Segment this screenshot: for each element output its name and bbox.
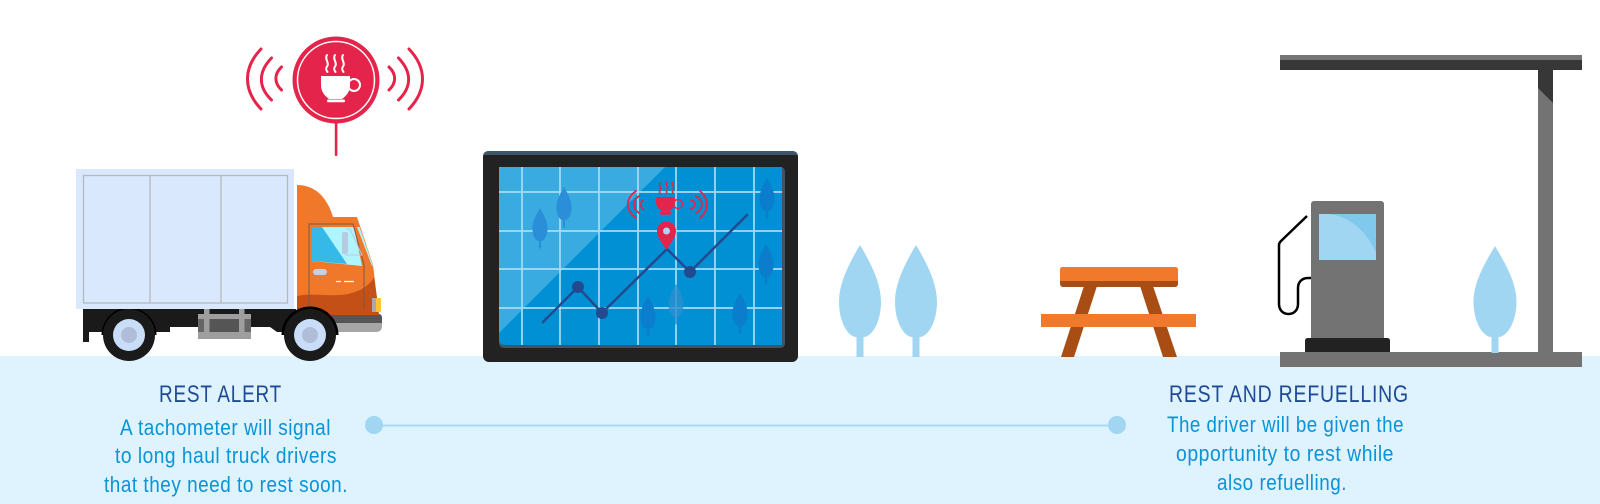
beacon disc bbox=[292, 36, 380, 124]
screen edge bbox=[499, 167, 785, 348]
description: rest alert bbox=[104, 415, 348, 497]
screen highlight bbox=[499, 167, 665, 333]
fuel tank bbox=[198, 309, 251, 339]
bench bbox=[1041, 314, 1196, 327]
side mirror bbox=[342, 229, 362, 255]
station canopy bbox=[1280, 55, 1582, 70]
door outline bbox=[309, 224, 364, 312]
fuel hose bbox=[1279, 216, 1312, 314]
rear wheel bbox=[103, 309, 155, 361]
headlight bbox=[372, 298, 381, 312]
text block: rest alert bbox=[104, 381, 348, 497]
timeline connector bbox=[365, 416, 1126, 434]
route line bbox=[543, 215, 747, 322]
alert beacon with coffee cup bbox=[248, 36, 422, 156]
description: rest alert: that they need to rest soon. bbox=[104, 472, 348, 497]
tree bbox=[1474, 246, 1516, 353]
icon: small coffee cup with signal bbox=[628, 182, 707, 218]
table legs bbox=[1061, 286, 1177, 357]
picnic table bbox=[1041, 267, 1196, 357]
station post bbox=[1538, 70, 1553, 355]
windshield bbox=[357, 227, 373, 266]
screen map bbox=[499, 167, 782, 345]
tablet navigation map bbox=[483, 151, 798, 362]
pump display bbox=[1319, 214, 1376, 260]
truck cargo box bbox=[76, 169, 294, 309]
signal waves left bbox=[248, 49, 282, 109]
fuel station bbox=[1279, 55, 1582, 367]
tree bbox=[895, 245, 937, 357]
text block: rest and refuelling bbox=[1167, 381, 1409, 495]
door handle bbox=[313, 269, 327, 275]
description: rest and refuelling: also refuelling. bbox=[1217, 470, 1347, 495]
truck cab bbox=[297, 185, 381, 315]
description: rest and refuelling: opportunity to rest while bbox=[1176, 441, 1394, 466]
truck bumper bbox=[330, 314, 382, 332]
station forecourt bbox=[1280, 352, 1582, 367]
map pin bbox=[657, 222, 676, 250]
beacon stem bbox=[335, 120, 337, 156]
description: rest alert: to long haul truck drivers bbox=[115, 443, 337, 468]
tree bbox=[839, 245, 881, 357]
front wheel bbox=[282, 306, 338, 361]
description: rest and refuelling: The driver will be given the bbox=[1167, 412, 1404, 437]
cab detail dashes bbox=[336, 280, 354, 282]
icon: coffee cup bbox=[321, 55, 360, 102]
description: rest and refuelling bbox=[1167, 412, 1404, 495]
heading: rest alert: REST ALERT bbox=[159, 381, 282, 408]
fuel pump bbox=[1305, 201, 1390, 352]
timeline start dot bbox=[365, 416, 383, 434]
truck bbox=[76, 169, 382, 361]
timeline end dot bbox=[1108, 416, 1126, 434]
signal waves right bbox=[389, 49, 422, 109]
cab side window bbox=[312, 227, 362, 266]
heading: rest and refuelling: REST AND REFUELLING bbox=[1169, 381, 1409, 408]
table top bbox=[1060, 267, 1178, 287]
map trees bbox=[532, 178, 775, 336]
tablet frame bbox=[483, 151, 798, 362]
description: rest alert: A tachometer will signal bbox=[120, 415, 331, 440]
ground band bbox=[0, 356, 1600, 504]
truck chassis bbox=[83, 308, 296, 342]
pump base bbox=[1305, 338, 1390, 352]
